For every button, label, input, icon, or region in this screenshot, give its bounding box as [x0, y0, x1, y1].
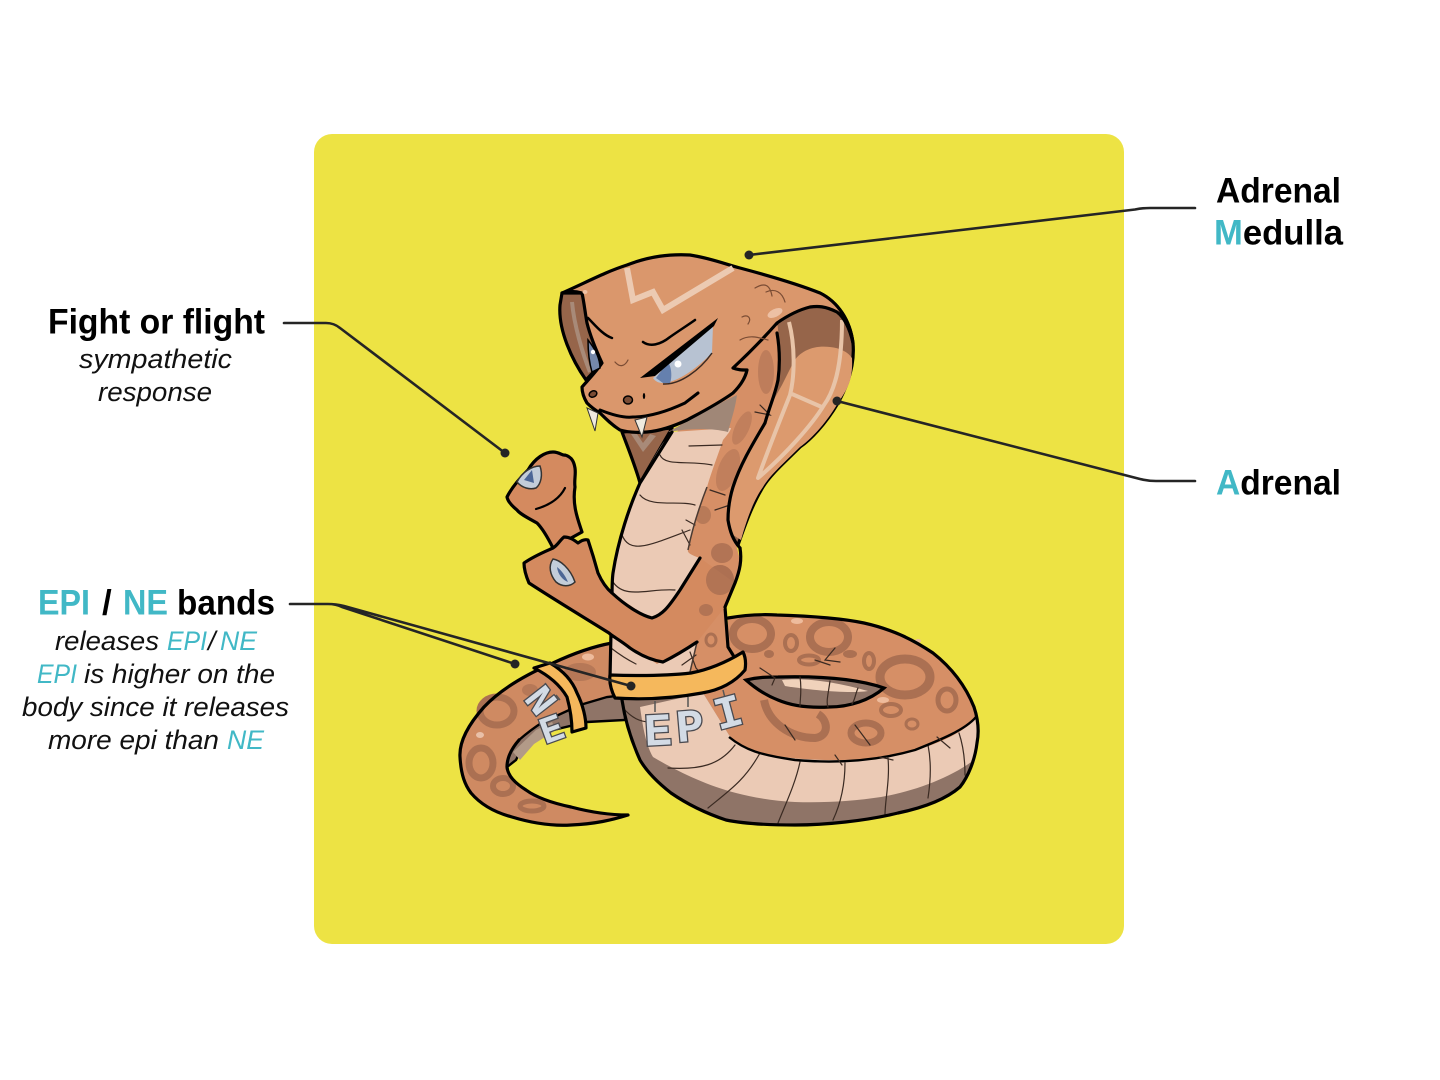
- leader: fight or flight: [284, 323, 510, 458]
- NE letters: [513, 679, 571, 756]
- label: EPI / NE bands: NE: [123, 584, 168, 622]
- snake arms and fists: [507, 452, 741, 662]
- label: EPI / NE bands: more epi than: [48, 725, 219, 755]
- label: EPI / NE bands: /: [206, 626, 218, 656]
- NE tail band: [534, 663, 586, 732]
- label: EPI / NE bands: body since it releases: [22, 692, 289, 722]
- label: EPI / NE bands: NE: [227, 725, 265, 755]
- snake neck and hood: [610, 293, 853, 690]
- label: adrenal medulla: [1214, 172, 1344, 252]
- label: EPI / NE bands: EPI: [37, 659, 77, 689]
- label: EPI / NE bands: releases: [55, 626, 159, 656]
- label: adrenal medulla: Medulla: [1214, 214, 1344, 252]
- gem on lower fist: [550, 559, 575, 586]
- snake head: [560, 255, 853, 437]
- NE letters: N: [513, 679, 563, 726]
- label: EPI / NE bands: [22, 584, 289, 755]
- illustration: cobra: [460, 255, 978, 825]
- panel: yellow background: [314, 134, 1124, 944]
- belly below arm: [610, 632, 697, 678]
- label: EPI / NE bands: NE: [220, 626, 258, 656]
- leader: EPI and NE bands: [290, 604, 636, 690]
- EPI letters: [643, 686, 749, 760]
- gem on upper fist: [517, 466, 541, 489]
- EPI letters: P: [674, 702, 706, 756]
- label: fight or flight: sympathetic: [79, 344, 233, 374]
- label: EPI / NE bands: /: [102, 584, 112, 622]
- label: EPI / NE bands: bands: [177, 584, 275, 622]
- label: EPI / NE bands: is higher on the: [84, 659, 275, 689]
- label: adrenal: Adrenal: [1216, 464, 1341, 502]
- label: fight or flight: [48, 302, 265, 407]
- leader: adrenal: [832, 396, 1195, 481]
- label: EPI / NE bands: EPI: [167, 626, 207, 656]
- EPI letters: E: [643, 706, 673, 760]
- EPI collar band: [610, 652, 746, 699]
- left eye: [588, 340, 600, 372]
- label: fight or flight: Fight or flight: [48, 302, 265, 342]
- right eye: [640, 318, 718, 384]
- snake tail: [460, 643, 628, 825]
- label: EPI / NE bands: EPI: [38, 584, 90, 622]
- EPI letters: I: [709, 686, 749, 744]
- label: adrenal medulla: Adrenal: [1216, 172, 1341, 210]
- label: fight or flight: response: [98, 377, 212, 407]
- snake coil body: [622, 615, 978, 825]
- leader: adrenal medulla: [744, 208, 1195, 260]
- NE letters: E: [535, 707, 571, 756]
